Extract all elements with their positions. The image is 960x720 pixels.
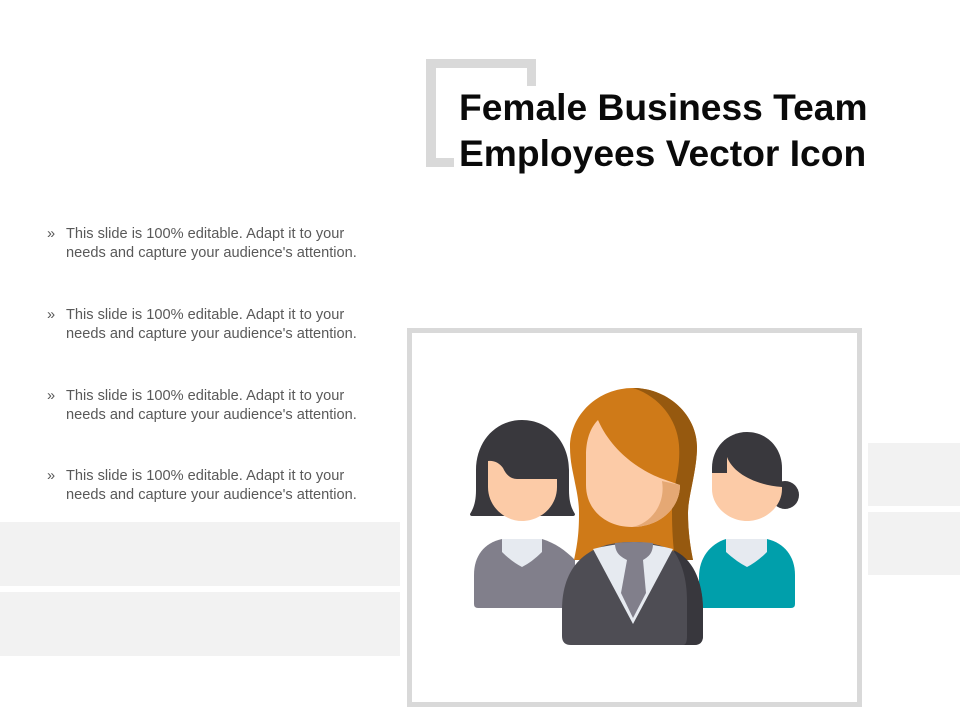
- bullet text 2: This slide is 100% editable. Adapt it to your: [66, 307, 344, 323]
- icon: left woman: [470, 420, 575, 608]
- face: [586, 420, 680, 527]
- bullet text 2: needs and capture your audience's attention.: [66, 326, 357, 342]
- bullet text 3: [47, 388, 357, 422]
- bullet text 4: needs and capture your audience's attention.: [66, 486, 357, 502]
- title: [459, 86, 868, 174]
- suit: [562, 542, 703, 645]
- bullet text 3: »: [47, 388, 55, 404]
- hair shadow: [633, 388, 697, 560]
- face shadow: [632, 481, 680, 527]
- hair: [570, 388, 697, 560]
- bullet text 1: »: [47, 226, 55, 242]
- bullet text 4: »: [47, 468, 55, 484]
- icon: center woman: [562, 388, 703, 645]
- bullet text 1: [47, 226, 357, 260]
- image frame panel: [407, 328, 862, 707]
- icon: right woman: [699, 432, 799, 608]
- title bracket: [426, 59, 536, 167]
- grey block: left lower: [0, 592, 400, 656]
- tie: [615, 542, 653, 618]
- title: Employees Vector Icon: [459, 132, 866, 174]
- collar: [593, 543, 673, 624]
- bullet text 1: needs and capture your audience's attention.: [66, 244, 357, 260]
- bullet text 1: This slide is 100% editable. Adapt it to your: [66, 226, 344, 242]
- bullet text 3: needs and capture your audience's attention.: [66, 406, 357, 422]
- suit shadow: [673, 550, 703, 645]
- title: Female Business Team: [459, 86, 868, 128]
- bullet text 4: [47, 468, 357, 502]
- bullet text 3: This slide is 100% editable. Adapt it to your: [66, 388, 344, 404]
- bullet text 2: [47, 307, 357, 342]
- bullet text 4: This slide is 100% editable. Adapt it to your: [66, 468, 344, 484]
- grey block: left upper: [0, 522, 400, 586]
- bullet text 2: »: [47, 307, 55, 323]
- grey block: right upper: [868, 443, 960, 506]
- grey block: right lower: [868, 512, 960, 575]
